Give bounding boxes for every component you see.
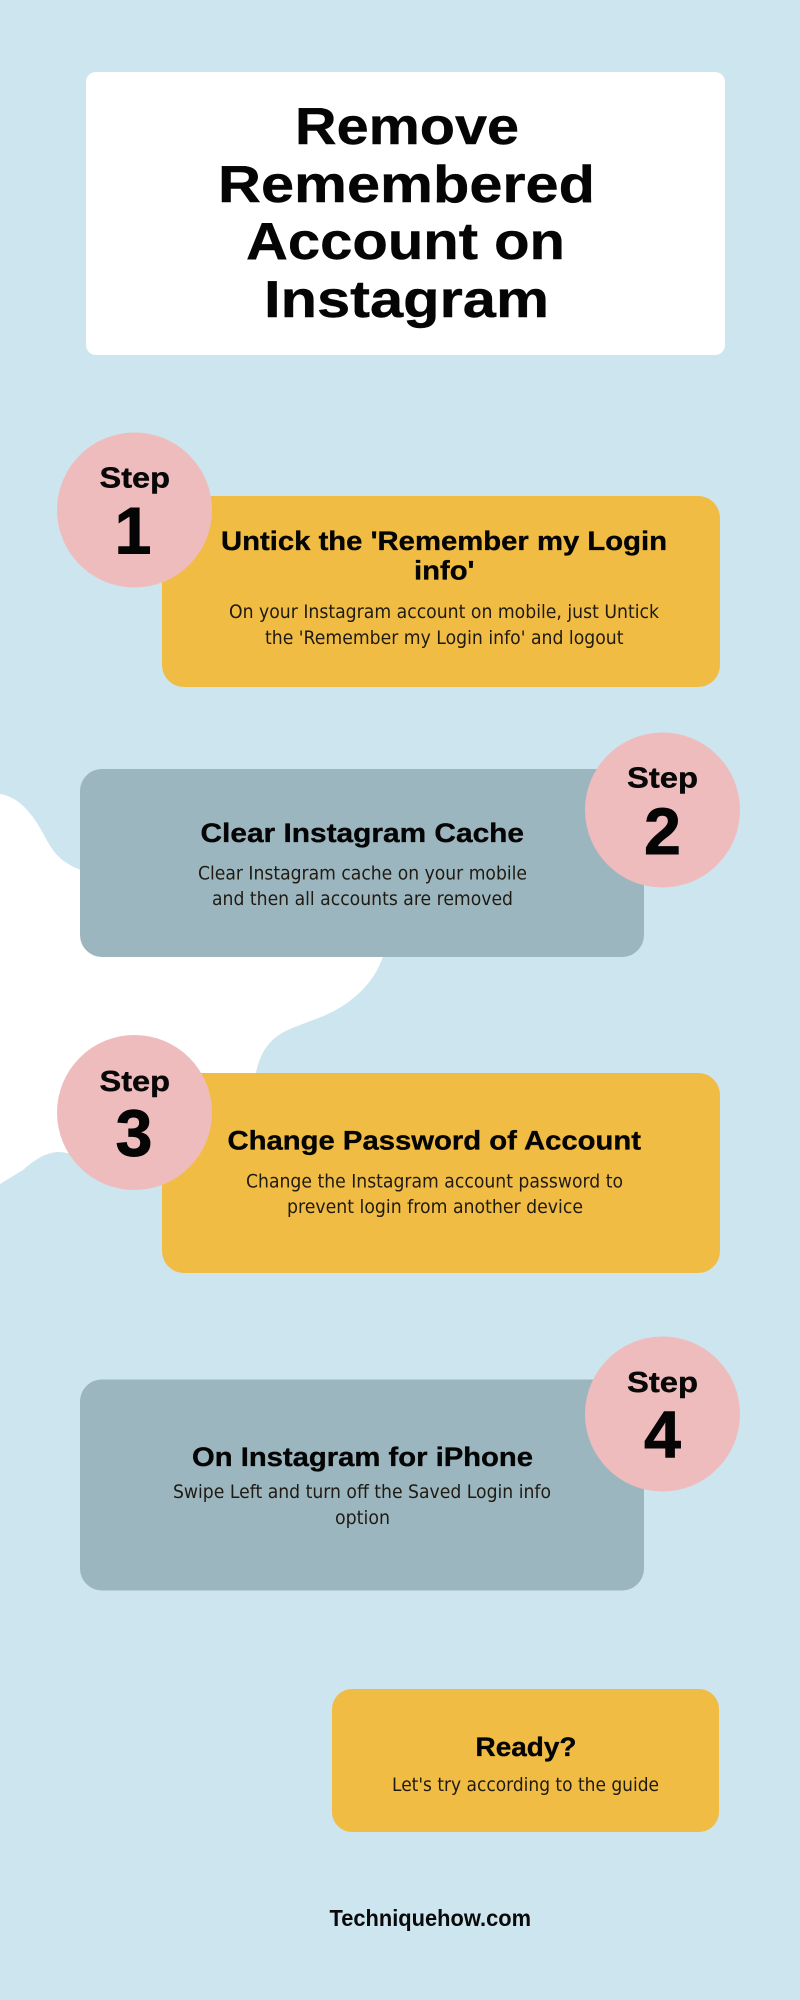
- step 1 badge: [57, 432, 212, 588]
- step 3 heading: Change Password of Account: [228, 1126, 641, 1156]
- title panel: [86, 72, 725, 355]
- step 4 badge: Step: [627, 1367, 698, 1399]
- step 2 heading: Clear Instagram Cache: [200, 818, 524, 848]
- panel: step 2: [80, 732, 740, 957]
- panel: step 1: [57, 432, 720, 687]
- step 4 badge: [585, 1336, 740, 1492]
- step 4 text: [173, 1481, 551, 1529]
- step 1 badge: 1: [115, 494, 151, 568]
- title: Remove: [295, 98, 519, 156]
- step 1 heading: info': [414, 556, 474, 586]
- step 1 text: [229, 601, 659, 649]
- step 3 text: Change the Instagram account password to: [246, 1170, 623, 1192]
- step 2 badge: Step: [627, 762, 698, 794]
- footer: website: Techniquehow.com: [330, 1905, 531, 1931]
- title: Instagram: [264, 271, 549, 329]
- step 3 badge: Step: [100, 1066, 170, 1098]
- step 4 heading: On Instagram for iPhone: [192, 1442, 533, 1472]
- step 3 text: prevent login from another device: [287, 1196, 583, 1218]
- title: Remembered: [218, 156, 595, 214]
- title: [218, 98, 595, 329]
- panel: ready: [332, 1689, 719, 1832]
- step 2 text: Clear Instagram cache on your mobile: [198, 862, 527, 884]
- step 2 badge: 2: [644, 794, 681, 868]
- step 1 text: On your Instagram account on mobile, just Untick: [229, 601, 659, 623]
- step 4 badge: 4: [644, 1397, 681, 1471]
- step 4 text: Swipe Left and turn off the Saved Login info: [173, 1481, 551, 1503]
- step 4 text: option: [335, 1507, 390, 1529]
- step 3 badge: 3: [116, 1096, 152, 1170]
- step 1 heading: [221, 526, 667, 586]
- step 1 heading: Untick the 'Remember my Login: [221, 526, 667, 556]
- step 1 text: the 'Remember my Login info' and logout: [265, 627, 624, 649]
- ready heading: Ready?: [476, 1732, 576, 1762]
- panel: step 4: [80, 1336, 740, 1590]
- title: Account on: [246, 213, 565, 271]
- step 2 text: [198, 862, 527, 910]
- step 1 badge: Step: [100, 462, 170, 494]
- step 3 text: [246, 1170, 623, 1218]
- step 2 badge: [585, 732, 740, 888]
- step 3 badge: [57, 1035, 212, 1190]
- ready text: Let's try according to the guide: [392, 1774, 659, 1796]
- panel: step 3: [57, 1035, 720, 1273]
- step 2 text: and then all accounts are removed: [212, 888, 513, 910]
